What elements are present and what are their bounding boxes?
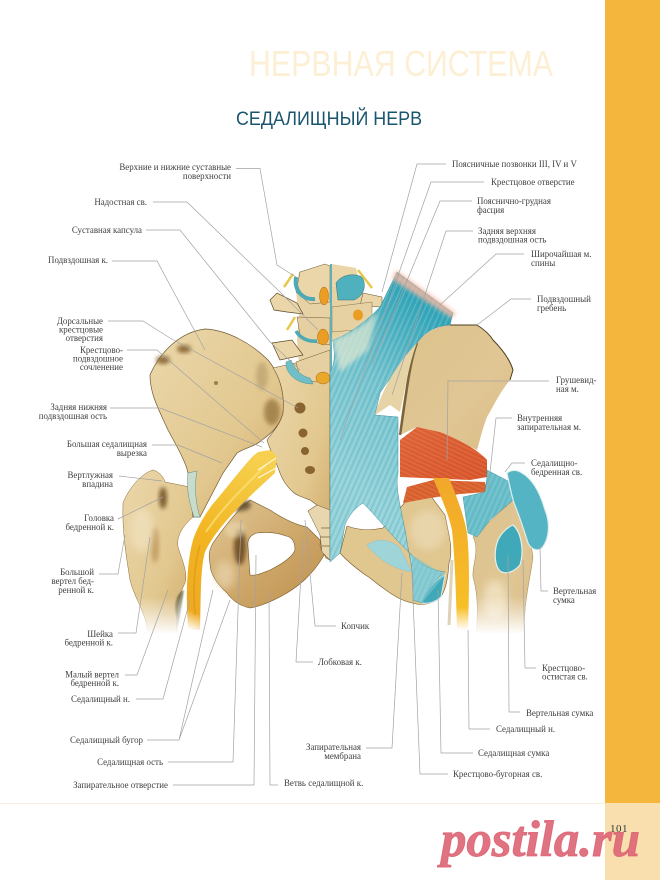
label: joint capsule: Суставная капсула [72,225,142,235]
label: greater sciatic notch [67,439,222,463]
label: femoral head: бедренной к. [65,522,114,532]
label: ischial spine: Седалищная ость [97,757,163,767]
label: sacrospinous ligament [523,560,588,682]
label: acetabulum: впадина [82,479,113,489]
label: posterior inferior iliac spine: Задняя нижняя [50,402,107,412]
trochanteric bursa oval [495,525,522,573]
label: upper and lower articular surfaces: Верхние и нижние суставные [119,162,231,172]
label: dorsal sacral foramina: отверстия [66,333,103,343]
label: pubis [296,540,362,667]
label: dorsal sacral foramina: крестцовые [59,324,103,334]
label: latissimus dorsi [440,249,591,305]
label: sacrofemoral ligament [505,458,582,477]
label: obturator membrane: мембрана [324,751,361,761]
label: lumbar vertebrae [382,159,578,292]
label: piriformis: Грушевид- [556,375,597,385]
label: thoracolumbar fascia: Пояснично-грудная [477,196,551,206]
label: dorsal sacral foramina [57,316,298,408]
trochanteric bursa upper [507,470,548,550]
label: ischial ramus [269,593,363,788]
label: piriformis [447,375,597,460]
label: internal obturator: Внутренняя [517,413,562,423]
label: ischial tuberosity [70,590,230,745]
label: ischial bursa: Седалищная сумка [478,748,549,758]
label: greater trochanter: ренной к. [58,585,94,595]
label: obturator membrane [306,573,402,761]
label: piriformis: ная м. [556,384,579,394]
sacroiliac ligaments [330,270,456,603]
label: sciatic nerve right: Седалищный н. [496,724,555,734]
label: acetabulum [68,470,162,489]
left ischium and pubis [209,499,327,608]
label: posterior superior iliac spine: Задняя верхняя [478,226,536,236]
watermark: postila.ru [437,812,640,868]
sacrofemoral ligaments [463,470,513,537]
label: obturator foramen [73,555,256,790]
label: coccyx: Копчик [341,621,370,631]
page heading: СЕДАЛИЩНЫЙ НЕРВ [236,106,422,130]
label: greater sciatic notch: вырезка [117,448,147,458]
label: posterior superior iliac spine: подвздошная ость [478,234,546,244]
label: thoracolumbar fascia [372,196,551,365]
lumbar vertebrae left half [270,264,331,384]
label: thoracolumbar fascia: фасция [477,205,504,215]
right femur [470,500,536,638]
label: obturator foramen: Запирательное отверстие [73,780,168,790]
label: ilium: Подвздошная к. [48,255,108,265]
label: joint capsule [72,225,300,370]
label: posterior superior iliac spine [392,226,546,395]
label: acetabulum: Вертлужная [68,470,113,480]
label: internal obturator: запирательная м. [517,422,581,432]
label: lumbar vertebrae: Поясничные позвонки III, IV и V [452,159,578,169]
ischial bursa [422,575,445,603]
label: sciatic nerve left: Седалищный н. [71,694,130,704]
label: sciatic nerve right [468,630,555,734]
label: ischial spine [97,520,241,767]
label: latissimus dorsi: Широчайшая м. [531,249,591,259]
label: ischial bursa [438,590,549,758]
label: upper and lower articular surfaces: поверхности [183,171,231,181]
label: trochanteric bursa upper: Вертельная [553,586,596,596]
label: sacrofemoral ligament: бедренная св. [531,467,582,477]
left femur [120,470,193,636]
label: femoral neck: бедренной к. [64,638,113,648]
label: trochanteric bursa upper [540,545,596,605]
lumbar vertebrae right half [331,264,382,378]
sciatic nerve left [187,450,277,630]
label: internal obturator [488,413,581,490]
label: coccyx [305,520,370,631]
label: sacral foramen [340,177,575,440]
illustration: pelvis and sciatic nerve [120,264,548,638]
label: sacrospinous ligament: Крестцово- [542,663,585,673]
label: iliac crest [477,294,591,325]
label: sacroiliac joint: подвздошное [73,354,123,364]
label: trochanteric bursa lower: Вертельная сумка [526,708,593,718]
label: femoral neck: Шейка [87,629,113,639]
label: posterior inferior iliac spine: подвздошная ость [39,411,107,421]
label: femoral neck [64,537,150,648]
right ischium and pubis [340,495,451,604]
label: greater trochanter: Большой [60,567,94,577]
obturator internus muscle [403,480,487,503]
label: iliac crest: гребень [537,303,566,313]
label: trochanteric bursa lower [508,555,593,718]
label: upper and lower articular surfaces [119,162,296,277]
label: ischial ramus: Ветвь седалищной к. [284,778,363,788]
label: posterior inferior iliac spine [39,402,262,447]
page number: 101 [610,823,628,835]
label: femoral head: Головка [84,513,114,523]
label: lesser trochanter: бедренной к. [70,678,119,688]
label: trochanteric bursa upper: сумка [553,595,575,605]
label: greater sciatic notch: Большая седалищная [67,439,147,449]
label: sacrotuberous ligament [412,573,542,779]
label: sacrospinous ligament: остистая св. [542,672,588,682]
label: femoral head [65,497,163,532]
piriformis muscle [400,427,487,480]
label: sacroiliac joint: Крестцово- [80,345,123,355]
label: sacroiliac joint [73,345,264,443]
label: ischial tuberosity: Седалищный бугор [70,735,144,745]
label: lesser trochanter [65,590,168,688]
label: sacrotuberous ligament: Крестцово-бугорная св. [453,769,542,779]
label: greater trochanter [51,535,125,595]
label: dorsal sacral foramina: Дорсальные [57,316,103,326]
label: iliac crest: Подвздошный [537,294,591,304]
label: sacroiliac joint: сочленение [80,362,123,372]
label: greater trochanter: вертел бед- [51,576,94,586]
label: sciatic nerve left [71,600,190,704]
label: sacrofemoral ligament: Седалищно- [531,458,578,468]
label: supraspinous ligament: Надостная св. [94,197,147,207]
left ilium [150,329,283,517]
label: sacral foramen: Крестцовое отверстие [491,177,575,187]
label: supraspinous ligament [94,197,318,330]
label: latissimus dorsi: спины [531,258,555,268]
label: ilium [48,255,205,350]
label: obturator membrane: Запирательная [306,742,361,752]
right ilium [400,325,513,450]
label: lesser trochanter: Малый вертел [65,670,120,680]
label: pubis: Лобковая к. [318,657,362,667]
sciatic nerve right [433,478,469,630]
sacrum and coccyx [267,362,330,560]
section title: НЕРВНАЯ СИСТЕМА [249,43,553,84]
